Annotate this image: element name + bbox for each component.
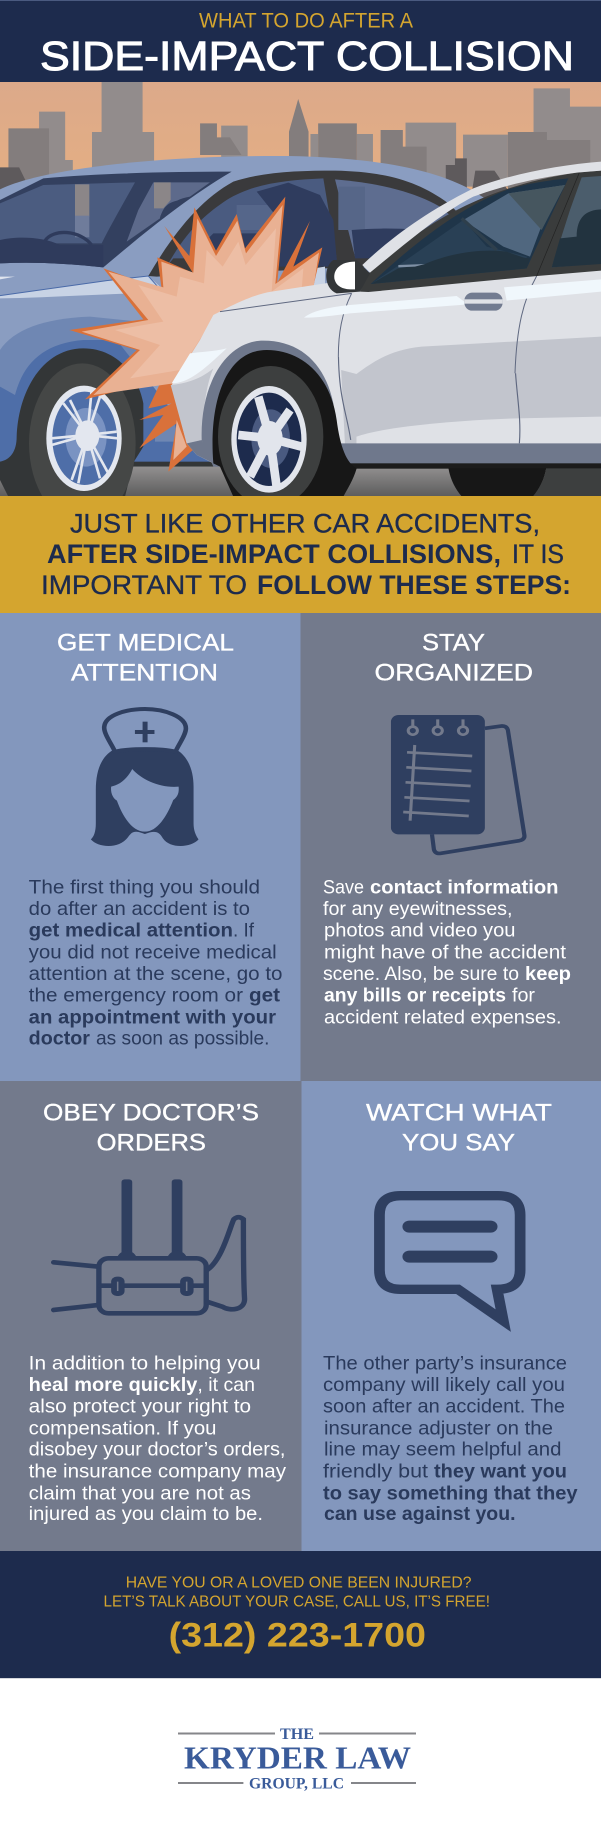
body text: attention at the scene, go to bbox=[29, 963, 283, 985]
body text: The other party’s insurance bbox=[323, 1352, 567, 1374]
heading: ORDERS bbox=[97, 1130, 206, 1157]
logo: The Kryder Law Group: GROUP, LLC bbox=[249, 1776, 344, 1793]
banner text: AFTER SIDE-IMPACT COLLISIONS, bbox=[47, 539, 501, 569]
banner text: IMPORTANT TO bbox=[41, 570, 247, 600]
body text: can use against you. bbox=[324, 1503, 516, 1525]
banner text: IT IS bbox=[512, 539, 564, 569]
call to action second line: LET’S TALK ABOUT YOUR CASE, CALL US, IT’S FREE! bbox=[104, 1593, 490, 1610]
body text: an appointment with your bbox=[29, 1006, 276, 1028]
logo: The Kryder Law Group: THE bbox=[280, 1726, 314, 1743]
heading bbox=[374, 630, 533, 687]
body text bbox=[323, 1352, 578, 1525]
heading: GET MEDICAL bbox=[57, 630, 234, 657]
body text: you did not receive medical bbox=[29, 941, 277, 963]
heading: STAY bbox=[422, 630, 485, 657]
body text: they want you bbox=[434, 1460, 567, 1482]
body text: keep bbox=[525, 963, 571, 985]
body text: line may seem helpful and bbox=[324, 1439, 562, 1461]
body text: get bbox=[249, 985, 281, 1007]
blue car lower body bbox=[0, 317, 228, 467]
body text: In addition to helping you bbox=[29, 1352, 261, 1374]
body text: also protect your right to bbox=[29, 1395, 251, 1417]
body text: insurance adjuster on the bbox=[324, 1417, 553, 1439]
body text: as soon as possible. bbox=[96, 1027, 270, 1049]
impact starburst bbox=[69, 197, 322, 472]
white car body bbox=[171, 260, 601, 497]
body text: the emergency room or bbox=[29, 985, 244, 1007]
body text bbox=[29, 876, 283, 1049]
side mirror bbox=[326, 260, 370, 293]
city skyline bbox=[0, 82, 601, 207]
road bbox=[0, 466, 546, 496]
body text: soon after an accident. The bbox=[323, 1395, 565, 1417]
body text: any bills or receipts bbox=[324, 985, 506, 1007]
body text: contact information bbox=[370, 876, 558, 898]
call to action text: HAVE YOU OR A LOVED ONE BEEN INJURED? bbox=[126, 1574, 472, 1591]
body text: heal more quickly bbox=[29, 1374, 198, 1396]
body text: do after an accident is to bbox=[29, 898, 250, 920]
title: SIDE-IMPACT COLLISION bbox=[40, 33, 574, 79]
call to action footer bbox=[0, 1551, 601, 1679]
white car details bbox=[220, 276, 601, 373]
hero illustration: two cars colliding bbox=[0, 82, 601, 523]
body text: accident related expenses. bbox=[324, 1006, 562, 1028]
logo: The Kryder Law Group bbox=[178, 1726, 416, 1793]
body text: friendly but bbox=[323, 1460, 429, 1482]
banner text: JUST LIKE OTHER CAR ACCIDENTS, bbox=[70, 509, 540, 539]
white car windows bbox=[326, 162, 601, 293]
blue car windshield bbox=[0, 172, 232, 298]
body text: The first thing you should bbox=[29, 876, 260, 898]
body text: to say something that they bbox=[323, 1482, 578, 1504]
body text: claim that you are not as bbox=[29, 1482, 251, 1504]
logo: The Kryder Law Group: KRYDER LAW bbox=[184, 1740, 411, 1776]
panel: get medical attention bbox=[0, 613, 300, 1081]
body text bbox=[323, 876, 571, 1028]
body text: for any eyewitnesses, bbox=[323, 898, 512, 920]
body text: the insurance company may bbox=[29, 1460, 286, 1482]
banner text: FOLLOW THESE STEPS: bbox=[257, 570, 571, 600]
header band bbox=[0, 0, 601, 82]
heading bbox=[366, 1100, 552, 1157]
heading bbox=[57, 630, 234, 687]
blue car side windows bbox=[148, 170, 456, 285]
banner text bbox=[41, 509, 571, 600]
icon: speech bubble bbox=[379, 1196, 520, 1321]
body text: for bbox=[512, 985, 536, 1007]
body text: injured as you claim to be. bbox=[29, 1503, 263, 1525]
body text: doctor bbox=[29, 1027, 90, 1049]
body text: Save bbox=[323, 876, 364, 898]
gold banner bbox=[0, 496, 601, 613]
icon: nurse bbox=[91, 709, 199, 846]
heading: YOU SAY bbox=[402, 1130, 515, 1157]
heading bbox=[43, 1100, 259, 1157]
body text: compensation. If you bbox=[29, 1417, 216, 1439]
panel: stay organized bbox=[300, 613, 601, 1081]
body text: company will likely call you bbox=[323, 1374, 565, 1396]
icon: notepad bbox=[391, 715, 524, 853]
blue car silhouette bbox=[0, 156, 484, 406]
body text: , it can bbox=[197, 1374, 255, 1396]
body text: get medical attention bbox=[29, 920, 233, 942]
heading: ORGANIZED bbox=[374, 660, 533, 687]
body text: . If bbox=[233, 920, 255, 942]
blue car front wheel bbox=[0, 348, 144, 496]
body text: might have of the accident bbox=[324, 941, 567, 963]
white car front wheel bbox=[202, 341, 357, 507]
heading: WATCH WHAT bbox=[366, 1100, 552, 1127]
heading: ATTENTION bbox=[71, 660, 218, 687]
header kicker: WHAT TO DO AFTER A bbox=[199, 9, 413, 32]
body text bbox=[29, 1352, 286, 1525]
panel: obey doctor's orders bbox=[0, 1081, 302, 1551]
heading: OBEY DOCTOR’S bbox=[43, 1100, 259, 1127]
phone number: (312) 223-1700 bbox=[169, 1617, 426, 1655]
body text: photos and video you bbox=[324, 920, 516, 942]
body text: scene. Also, be sure to bbox=[323, 963, 519, 985]
panel: watch what you say bbox=[302, 1081, 601, 1551]
body text: disobey your doctor’s orders, bbox=[29, 1439, 285, 1461]
icon: leg in cast bbox=[54, 1179, 245, 1313]
